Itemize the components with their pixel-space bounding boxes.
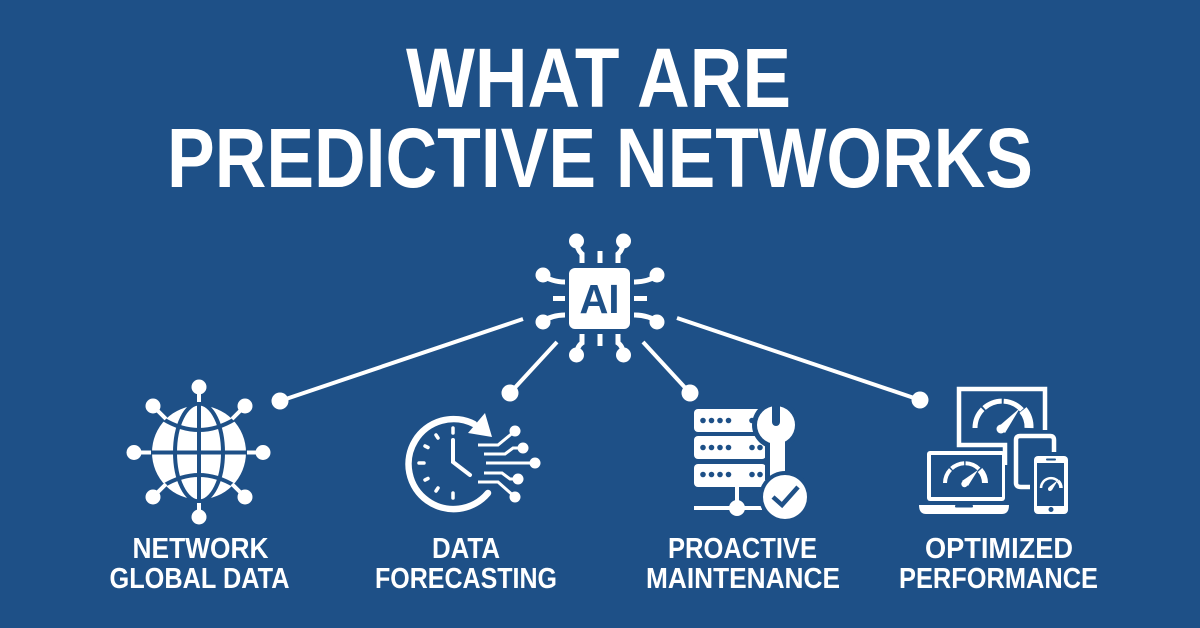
label: data forecasting: DATA: [432, 533, 500, 565]
title: PREDICTIVE NETWORKS: [167, 111, 1033, 205]
connector: AI to proactive maintenance: [643, 342, 698, 402]
label: network global data: GLOBAL DATA: [110, 563, 290, 595]
label: proactive maintenance: MAINTENANCE: [646, 563, 840, 595]
icon: clock with data lines: [409, 413, 540, 509]
label: data forecasting: FORECASTING: [375, 563, 557, 595]
title: WHAT ARE: [406, 31, 791, 125]
label: proactive maintenance: PROACTIVE: [668, 533, 817, 565]
icon: devices with gauges: [919, 389, 1068, 514]
icon: network globe: [126, 380, 270, 524]
label: optimized performance: PERFORMANCE: [899, 563, 1098, 595]
connector: AI to optimized performance: [677, 318, 928, 408]
connector: AI to network global data: [272, 319, 523, 410]
icon: AI chip: [536, 234, 664, 362]
icon: AI chip: AI: [580, 276, 620, 322]
icon: server with wrench and check: [694, 400, 811, 523]
label: optimized performance: [899, 533, 1098, 595]
label: proactive maintenance: [646, 533, 840, 595]
label: network global data: [110, 533, 290, 595]
label: data forecasting: [375, 533, 557, 595]
title: [167, 31, 1033, 205]
label: network global data: NETWORK: [132, 533, 269, 565]
connector: AI to data forecasting: [502, 342, 557, 402]
label: optimized performance: OPTIMIZED: [925, 533, 1073, 565]
